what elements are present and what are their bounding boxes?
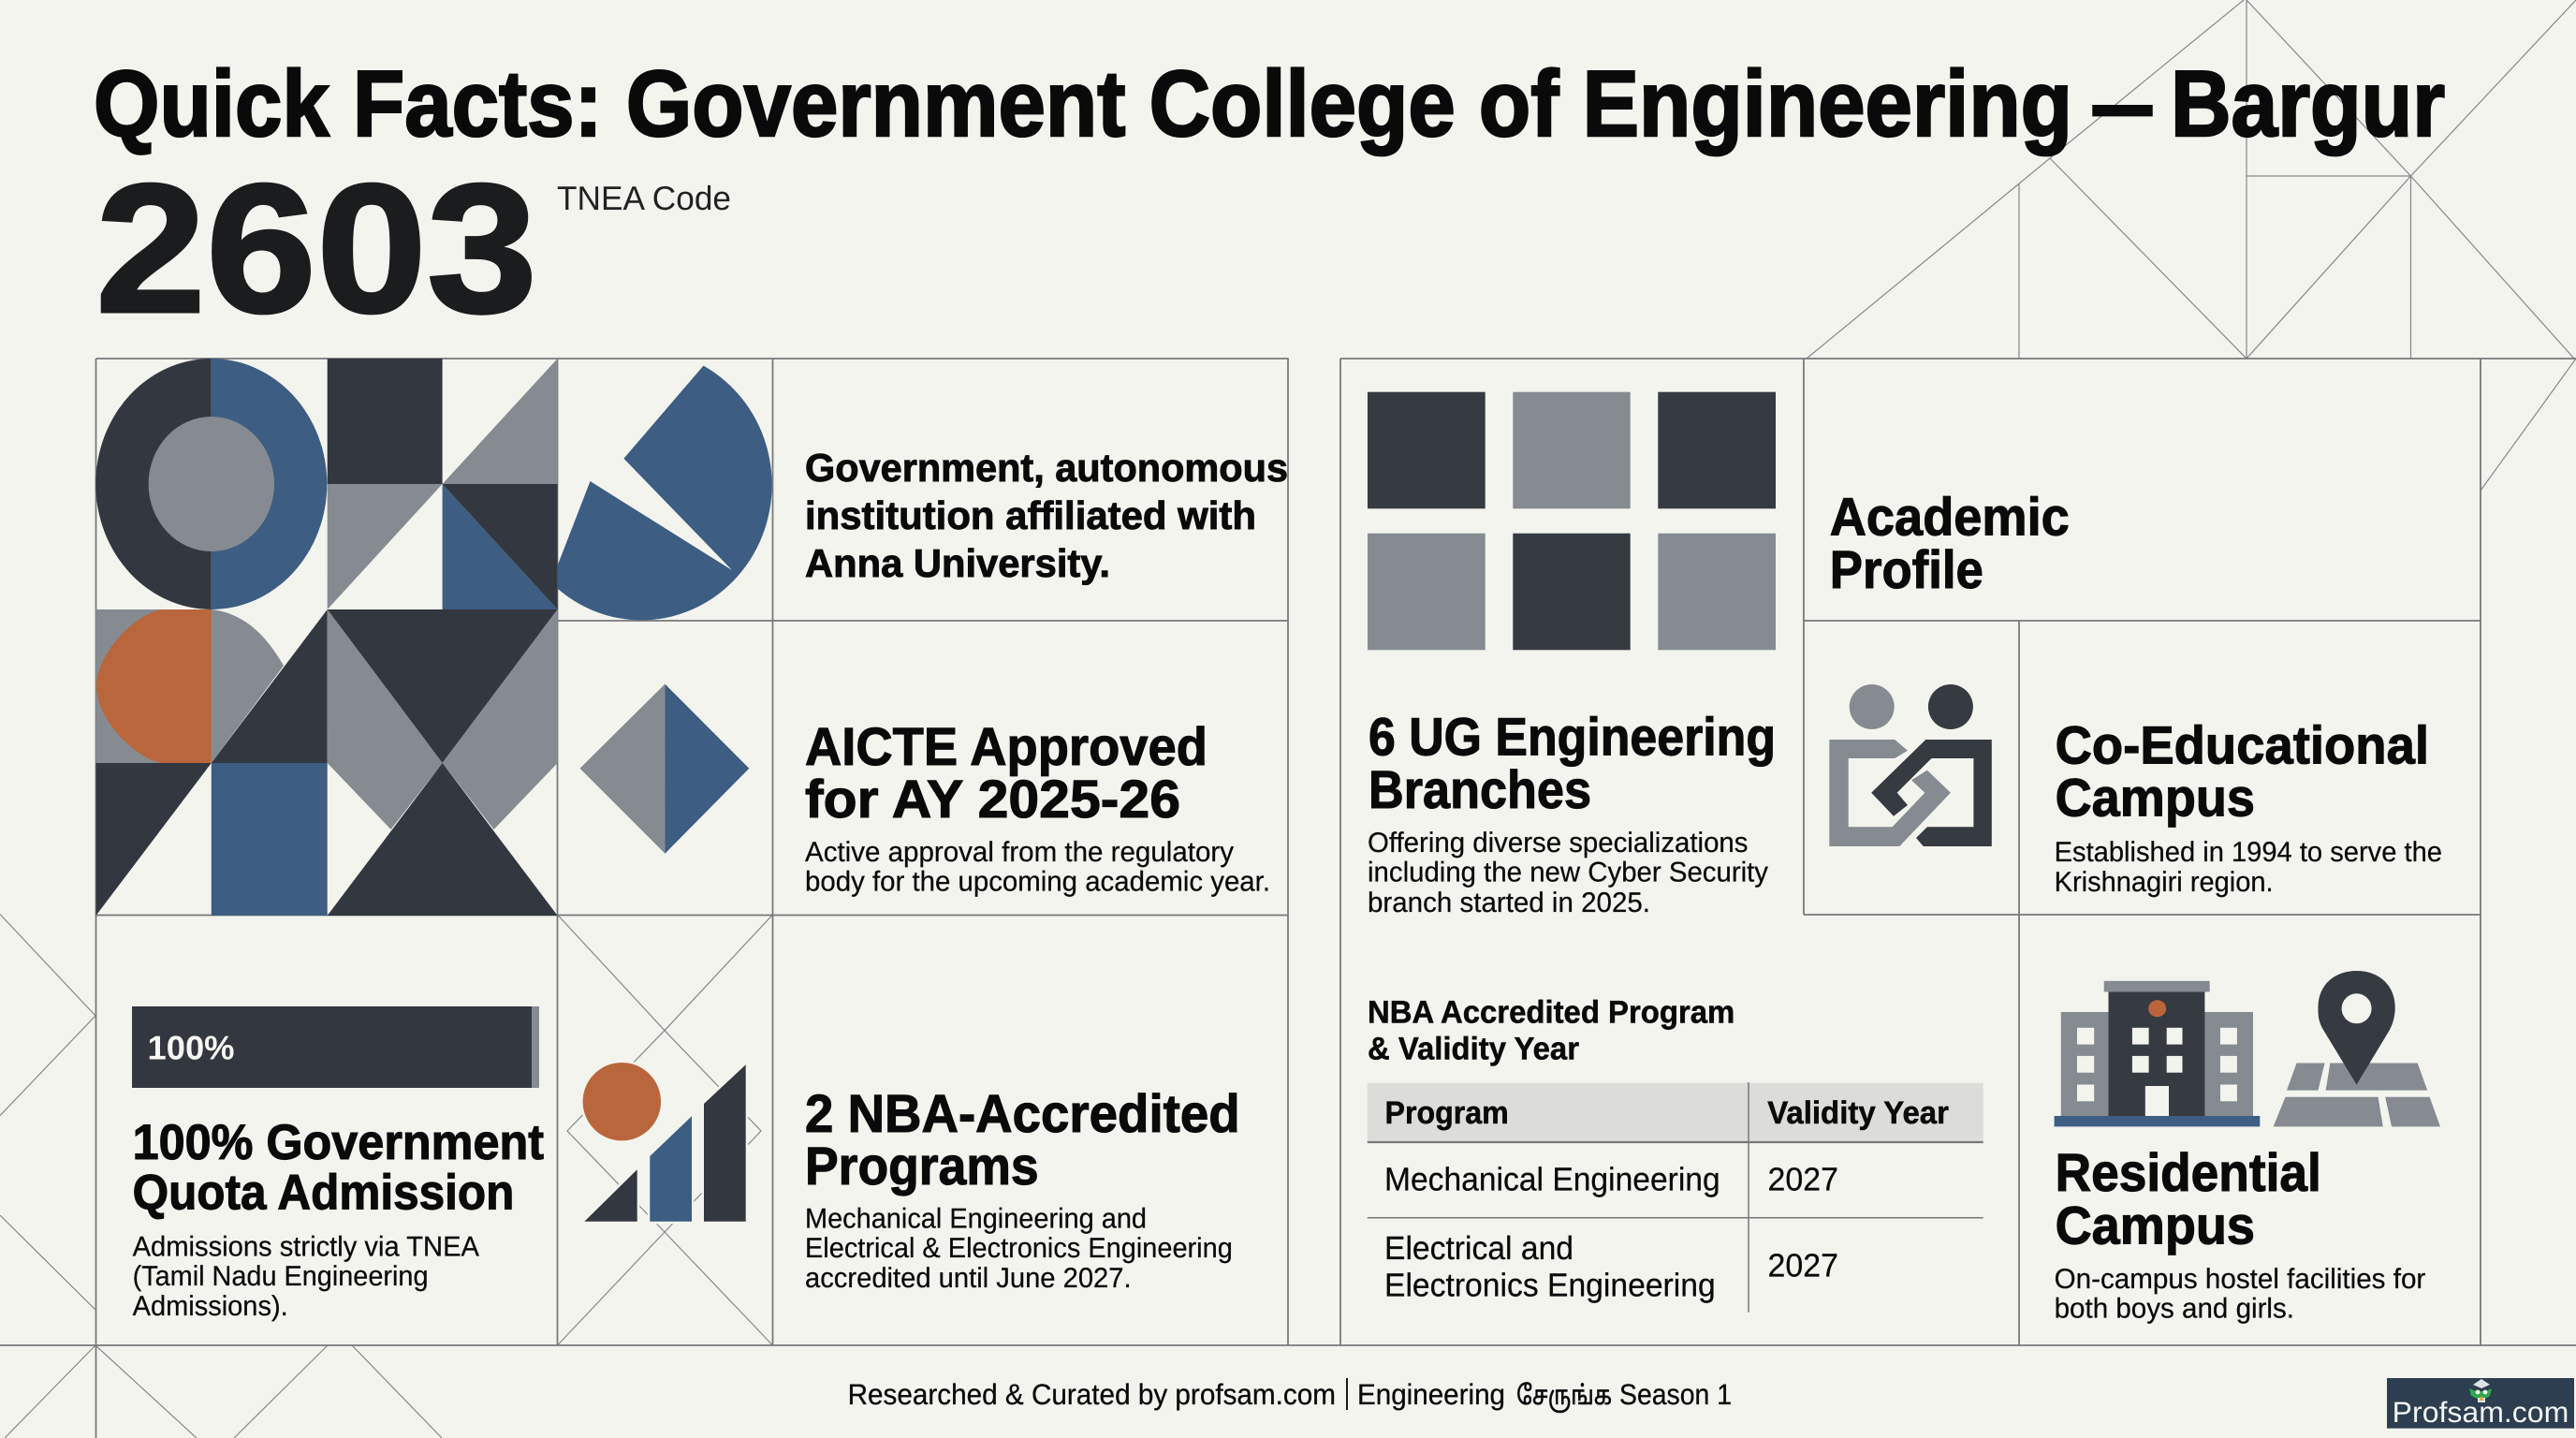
text: residential campus: Residential bbox=[2056, 1143, 2321, 1203]
text: government quota: Admissions). bbox=[133, 1291, 288, 1322]
title: Quick Facts: Government College of Engineering bbox=[94, 51, 2072, 156]
text: institution status bbox=[805, 446, 1288, 585]
geometric mosaic artwork bbox=[95, 359, 558, 916]
text: co-educational campus: Co-Educational bbox=[2056, 716, 2429, 776]
icon: mascot bbox=[2469, 1379, 2492, 1402]
text: UG branches: Branches bbox=[1368, 760, 1591, 820]
text: AICTE approval: Active approval from the regulatory bbox=[805, 837, 1234, 868]
text: institution status: Anna University. bbox=[805, 541, 1110, 585]
stat: TNEA code 2603: TNEA Code bbox=[557, 179, 731, 217]
logo: Profsam.com bbox=[2387, 1378, 2574, 1429]
table: NBA accredited program validity: Electrical and bbox=[1384, 1230, 1573, 1267]
stat: TNEA code 2603: 2603 bbox=[95, 146, 537, 351]
text: co-educational campus: Krishnagiri region. bbox=[2055, 867, 2274, 898]
table heading bbox=[1368, 995, 1734, 1067]
text: government quota bbox=[133, 1115, 544, 1322]
text: institution status: Government, autonomous bbox=[805, 446, 1288, 490]
text: NBA accredited programs: 2 NBA-Accredited bbox=[805, 1084, 1240, 1144]
logo: Profsam.com: Profsam.com bbox=[2393, 1396, 2569, 1429]
text: AICTE approval: body for the upcoming academic year. bbox=[805, 867, 1270, 898]
icon: two linked people bbox=[1829, 684, 1992, 846]
icon: six branch squares bbox=[1368, 392, 1776, 650]
text: NBA accredited programs: Programs bbox=[805, 1137, 1039, 1196]
text: UG branches bbox=[1368, 708, 1776, 918]
table: NBA accredited program validity: 2027 bbox=[1767, 1247, 1838, 1284]
icon: rising bars with sun bbox=[583, 1063, 746, 1222]
text: residential campus bbox=[2055, 1143, 2425, 1324]
text: UG branches: Offering diverse specializations bbox=[1368, 828, 1749, 858]
title: Bargur bbox=[2171, 51, 2445, 156]
text: AICTE approval: AICTE Approved bbox=[805, 717, 1208, 777]
heading: academic profile: Academic bbox=[1830, 488, 2070, 548]
text: NBA accredited programs: Electrical & Electronics Engineering bbox=[805, 1233, 1233, 1264]
text: UG branches: 6 UG Engineering bbox=[1368, 708, 1776, 768]
text: AICTE approval: for AY 2025-26 bbox=[805, 770, 1180, 829]
text: co-educational campus: Established in 1994 to serve the bbox=[2055, 837, 2442, 868]
table: NBA accredited program validity: Validity Year bbox=[1767, 1095, 1949, 1131]
footer credit: Researched & Curated by profsam.com bbox=[848, 1378, 1336, 1411]
table: NBA accredited program validity: 2027 bbox=[1767, 1162, 1838, 1198]
progress bar: 100% bbox=[132, 1006, 539, 1088]
text: government quota: (Tamil Nadu Engineering bbox=[133, 1261, 429, 1292]
text: co-educational campus: Campus bbox=[2056, 769, 2255, 829]
text: residential campus: Campus bbox=[2056, 1196, 2255, 1255]
panel: right facts bbox=[1368, 392, 2442, 1324]
heading: academic profile bbox=[1830, 488, 2070, 600]
icon: campus building and map pin bbox=[2055, 971, 2440, 1126]
text: NBA accredited programs: accredited until June 2027. bbox=[805, 1263, 1132, 1294]
title: — bbox=[2093, 51, 2152, 156]
icon: blue pie bbox=[558, 366, 772, 620]
table: NBA accredited program validity: Electronics Engineering bbox=[1384, 1267, 1716, 1303]
text: UG branches: including the new Cyber Security bbox=[1368, 858, 1768, 888]
stat: TNEA code 2603 bbox=[95, 146, 731, 351]
text: co-educational campus bbox=[2055, 716, 2442, 898]
text: NBA accredited programs bbox=[805, 1084, 1240, 1294]
text: government quota: Quota Admission bbox=[133, 1166, 514, 1221]
text: UG branches: branch started in 2025. bbox=[1368, 888, 1650, 918]
table heading: & Validity Year bbox=[1368, 1032, 1579, 1067]
text: residential campus: both boys and girls. bbox=[2055, 1293, 2294, 1324]
icon: diamond bbox=[580, 684, 749, 854]
footer credit: Engineering bbox=[1357, 1378, 1505, 1411]
text: NBA accredited programs: Mechanical Engineering and bbox=[805, 1204, 1147, 1235]
text: government quota: 100% Government bbox=[133, 1115, 544, 1170]
text: residential campus: On-campus hostel facilities for bbox=[2055, 1264, 2425, 1295]
footer credit: Season 1 bbox=[1619, 1378, 1732, 1411]
text: AICTE approval bbox=[805, 717, 1270, 898]
table heading: NBA Accredited Program bbox=[1368, 995, 1734, 1031]
footer credit bbox=[848, 1378, 1732, 1413]
heading: academic profile: Profile bbox=[1830, 540, 1983, 600]
progress bar: 100%: 100% bbox=[148, 1029, 234, 1067]
table: NBA accredited program validity: Program bbox=[1385, 1095, 1509, 1131]
table: NBA accredited program validity bbox=[1368, 995, 1983, 1313]
panel: left facts bbox=[95, 359, 1288, 1322]
footer credit: சேருங்க bbox=[1516, 1381, 1612, 1413]
text: institution status: institution affiliated with bbox=[805, 493, 1256, 537]
table: NBA accredited program validity: Mechanical Engineering bbox=[1384, 1162, 1720, 1198]
text: government quota: Admissions strictly via TNEA bbox=[133, 1232, 479, 1263]
